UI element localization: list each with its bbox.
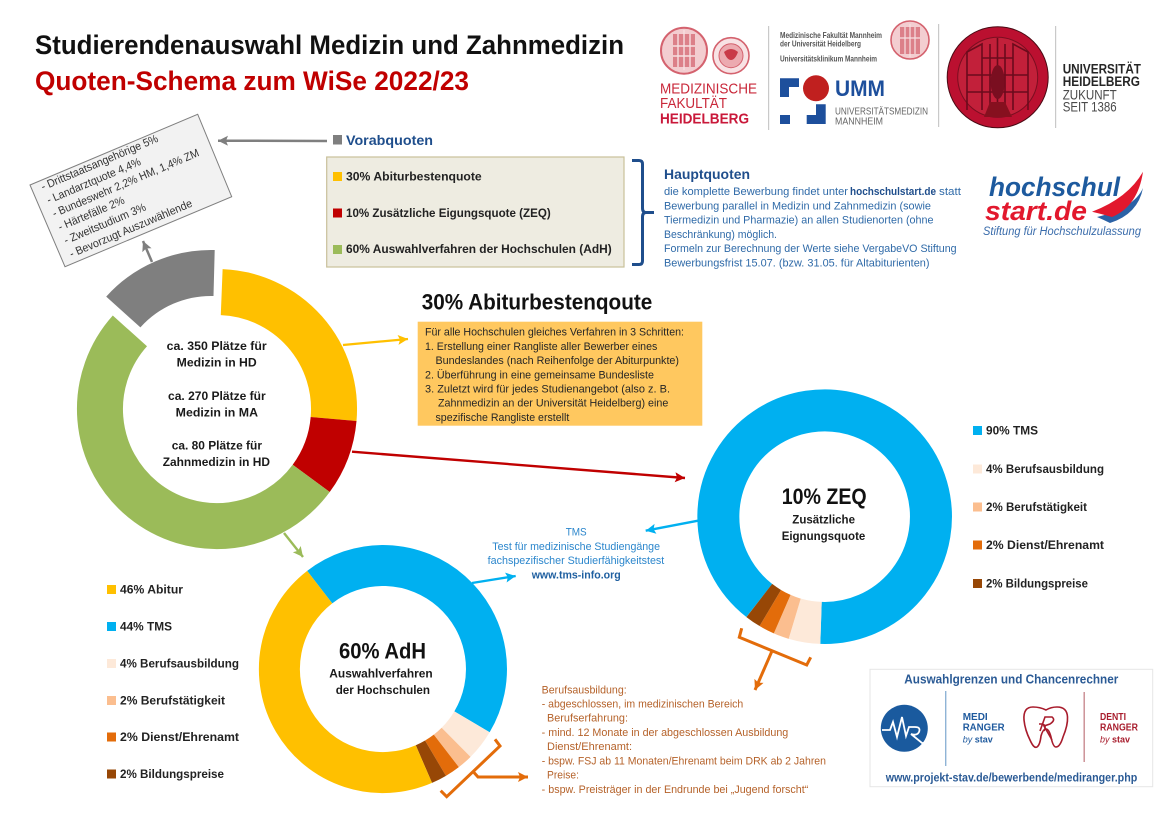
text: ZEQ center: 10% ZEQ (782, 484, 867, 509)
text block: Berufsausbildung details: - bspw. FSJ ab 11 Monaten/Ehrenamt beim DRK ab 2 Jahren (542, 755, 826, 767)
legend: AdH: 46% Abitur (120, 582, 183, 596)
segment: 2% Bildungspreise (424, 758, 436, 764)
title: Studierendenauswahl Medizin und Zahnmedizin (35, 30, 624, 60)
text: Denti Ranger: DENTI (1100, 711, 1126, 723)
legend: AdH (107, 582, 239, 781)
arrow: Vorabquoten to note (218, 139, 327, 142)
text block: Hauptquoten: Hauptquoten (664, 166, 750, 182)
legend: AdH: 4% Berufsausbildung (120, 656, 239, 670)
text block: Plätze: Zahnmedizin in HD (163, 455, 270, 469)
text: ZEQ center: Eignungsquote (782, 529, 866, 543)
arrow: red to ZEQ (352, 452, 685, 478)
text: AdH center: der Hochschulen (336, 683, 430, 697)
callout: Vorabquoten note: - Härtefälle 2% (57, 195, 127, 234)
text block: Hauptquoten: Tiermedizin und Pharmazie) an allen Studienorten (ohne (664, 215, 934, 227)
icon: DentiRanger tooth (1024, 707, 1068, 747)
text block: Hauptquoten: statt (939, 186, 961, 198)
segment: 2% Dienst/Ehrenamt (770, 608, 782, 614)
logo: Universität Heidelberg seal: HEIDELBERG (1063, 74, 1140, 89)
logo: Universitätsmedizin Mannheim: Universitätsklinikum Mannheim (780, 55, 877, 64)
segment: 2% Dienst/Ehrenamt (436, 751, 446, 758)
text block: Plätze: ca. 350 Plätze für (167, 339, 267, 353)
arrow: green to AdH (284, 533, 303, 557)
logo: hochschulstart.de (983, 172, 1143, 238)
logo: Universitätsmedizin Mannheim: Medizinische Fakultät Mannheim (780, 31, 882, 40)
legend: ZEQ: 90% TMS (986, 424, 1038, 438)
logo: Universitätsmedizin Mannheim: UMM (835, 76, 885, 101)
chart: ZEQ donut (718, 410, 931, 623)
callout: Vorabquoten note: - Drittstaatsangehörige 5% (39, 133, 160, 193)
legend: ZEQ: 2% Bildungspreise (986, 576, 1088, 590)
segment: ZEQ 10% (311, 419, 334, 478)
icon: brace (632, 160, 654, 264)
heading: Vorabquoten legend: Vorabquoten (346, 133, 433, 148)
title: Quoten-Schema zum WiSe 2022/23 (35, 66, 469, 96)
logo: Medizinische Fakultät Heidelberg: MEDIZINISCHE (660, 80, 757, 97)
logo: hochschulstart.de: hochschul (989, 172, 1120, 202)
text block: Hauptquoten: Formeln zur Berechnung der Werte siehe VergabeVO Stiftung (664, 243, 957, 255)
chart: main donut (100, 273, 334, 526)
text block: Hauptquoten: Bewerbung parallel in Medizin und Zahnmedizin (sowie (664, 200, 931, 212)
text block: Berufsausbildung details: Preise: (547, 770, 579, 782)
segment: 44% TMS (320, 566, 486, 722)
segment: Vorabquoten (123, 273, 214, 312)
text block: TMS: TMS (566, 527, 587, 539)
logo: Universitätsmedizin Mannheim: MANNHEIM (835, 116, 883, 128)
arrow: yellow to Abiturbestenquote (343, 339, 408, 345)
text: AdH center: 60% AdH (339, 638, 426, 663)
title (35, 30, 624, 96)
text block: Berufsausbildung details: - bspw. Preisträger in der Endrunde bei „Jugend forscht“ (542, 784, 809, 796)
text block: Berufsausbildung details: Berufsausbildung: (542, 684, 627, 696)
text block: Berufsausbildung details: - mind. 12 Monate in der abgeschlossen Ausbildung (542, 727, 788, 739)
legend: ZEQ: 4% Berufsausbildung (986, 462, 1104, 476)
logo: hochschulstart.de: start.de (985, 196, 1087, 226)
panel: Abiturbestenquote steps: Für alle Hochschulen gleiches Verfahren in 3 Schritten: (425, 327, 684, 339)
legend: AdH: 2% Dienst/Ehrenamt (120, 730, 239, 744)
text: Denti Ranger: RANGER (1100, 722, 1138, 734)
panel: Abiturbestenquote steps: 1. Erstellung einer Rangliste aller Bewerber eines (425, 341, 658, 353)
text: AdH center: Auswahlverfahren (329, 667, 433, 681)
text: Medi Ranger: by stav (963, 735, 993, 745)
text: Denti Ranger: by stav (1100, 735, 1130, 745)
segment: 2% Berufstätigkeit (782, 614, 795, 619)
logo: Universitätsmedizin Mannheim: UNIVERSITÄTSMEDIZIN (835, 105, 928, 117)
text: Medi Ranger: RANGER (963, 722, 1005, 734)
text block: Hauptquoten: Bewerbungsfrist 15.07. (bzw. 31.05. für Altabiturienten) (664, 258, 930, 270)
text block: Berufsausbildung details: Berufserfahrung: (547, 713, 628, 725)
text: AdH center (329, 638, 433, 697)
panel: Abiturbestenquote steps: Bundeslandes (nach Reihenfolge der Abiturpunkte) (436, 355, 679, 367)
callout: Vorabquoten note (30, 114, 232, 267)
arrow: AdH orange bracket (441, 739, 528, 797)
panel: Abiturbestenquote steps: Zahnmedizin an der Universität Heidelberg) eine (438, 398, 668, 410)
arrow: AdH blue to TMS (472, 576, 516, 583)
text: Medi Ranger: MEDI (963, 711, 988, 723)
segment: 2% Bildungspreise (759, 600, 770, 608)
heading: Chancenrechner: Auswahlgrenzen und Chancenrechner (904, 672, 1118, 686)
panel: Hauptquoten legend: 10% Zusätzliche Eigungsquote (ZEQ) (346, 206, 551, 220)
text block: Plätze: ca. 80 Plätze für (172, 438, 262, 452)
text block: Hauptquoten: Beschränkung) möglich. (664, 229, 777, 241)
legend: AdH: 2% Bildungspreise (120, 767, 224, 781)
callout: Vorabquoten note: - Landarztquote 4,4% (45, 156, 143, 207)
logo: Universität Heidelberg seal: SEIT 1386 (1063, 100, 1117, 115)
logo: Medizinische Fakultät Heidelberg: HEIDELBERG (660, 110, 749, 127)
text block: Hauptquoten: hochschulstart.de (850, 186, 936, 198)
segment: AdH 60% (100, 331, 311, 526)
text block: TMS (488, 527, 664, 581)
text block: Hauptquoten: die komplette Bewerbung findet unter (664, 186, 848, 198)
logo: Universitätsmedizin Mannheim: der Universität Heidelberg (780, 40, 861, 49)
text: ZEQ center (782, 484, 867, 543)
text block: Berufsausbildung details (542, 684, 826, 796)
panel: Hauptquoten legend: 30% Abiturbestenquote (346, 170, 482, 184)
logo: Universitätsmedizin Mannheim (780, 21, 929, 128)
text block: TMS: Test für medizinische Studiengänge (492, 541, 660, 553)
text block: Hauptquoten (664, 166, 961, 270)
panel: Abiturbestenquote steps: 2. Überführung in eine gemeinsame Bundesliste (425, 369, 654, 381)
text block: TMS: www.tms-info.org (531, 569, 621, 581)
text block: Berufsausbildung details: - abgeschlossen, im medizinischen Bereich (542, 698, 743, 710)
legend: ZEQ: 2% Dienst/Ehrenamt (986, 538, 1104, 552)
logo: hochschulstart.de: Stiftung für Hochschulzulassung (983, 226, 1142, 238)
callout: Vorabquoten note: - Bevorzugt Auszuwählende (68, 198, 194, 260)
link: projekt-stav: www.projekt-stav.de/bewerbende/mediranger.php (885, 773, 1137, 785)
logo: Universität Heidelberg seal (947, 27, 1142, 128)
logo: Medizinische Fakultät Heidelberg: FAKULTÄT (660, 95, 727, 112)
arrow: ZEQ blue to TMS (646, 521, 698, 531)
arrow: ZEQ orange bracket (739, 628, 811, 690)
segment: 2% Berufstätigkeit (446, 742, 456, 751)
legend: AdH: 2% Berufstätigkeit (120, 694, 225, 708)
chart: AdH donut (279, 566, 486, 773)
logo: Universität Heidelberg seal: ZUKUNFT (1063, 87, 1117, 102)
legend: ZEQ (973, 424, 1104, 590)
arrow: gray segment to note (143, 241, 152, 262)
segment: 4% Berufsausbildung (795, 619, 821, 623)
callout: Vorabquoten note: - Bundeswehr 2,2% HM, 1,4% ZM (51, 147, 201, 220)
panel: Hauptquoten legend: 60% Auswahlverfahren der Hochschulen (AdH) (346, 242, 612, 256)
icon: MediRanger (881, 705, 928, 752)
text block: Plätze: ca. 270 Plätze für (168, 389, 266, 403)
text block: Plätze: Medizin in HD (177, 356, 257, 370)
legend: ZEQ: 2% Berufstätigkeit (986, 500, 1087, 514)
text block: Plätze (163, 339, 270, 469)
logo: Universität Heidelberg seal: UNIVERSITÄT (1063, 61, 1142, 76)
text: Denti Ranger (1100, 711, 1138, 745)
segment: 4% Berufsausbildung (456, 722, 472, 742)
panel: Abiturbestenquote steps: spezifische Rangliste erstellt (436, 412, 569, 424)
text: ZEQ center: Zusätzliche (792, 512, 855, 526)
segment: 90% TMS (718, 410, 931, 623)
text: Medi Ranger (963, 711, 1005, 745)
heading: Abiturbestenquote: 30% Abiturbestenqoute (422, 289, 652, 314)
text block: Plätze: Medizin in MA (176, 406, 258, 420)
panel: Hauptquoten legend (327, 157, 624, 267)
legend: AdH: 44% TMS (120, 620, 172, 634)
segment: Abiturbestenquote 30% (222, 292, 334, 419)
logo: Medizinische Fakultät Heidelberg (660, 28, 757, 127)
text block: TMS: fachspezifischer Studierfähigkeitstest (488, 555, 664, 567)
panel: Auswahlgrenzen und Chancenrechner (870, 669, 1153, 787)
callout: Vorabquoten note: - Zweitstudium 3% (62, 202, 148, 247)
panel: Abiturbestenquote steps: 3. Zuletzt wird für jedes Studienangebot (also z. B. (425, 384, 670, 396)
panel: Abiturbestenquote steps (418, 322, 702, 426)
segment: 46% Abitur (279, 587, 424, 773)
text block: Berufsausbildung details: Dienst/Ehrenamt: (547, 741, 632, 753)
